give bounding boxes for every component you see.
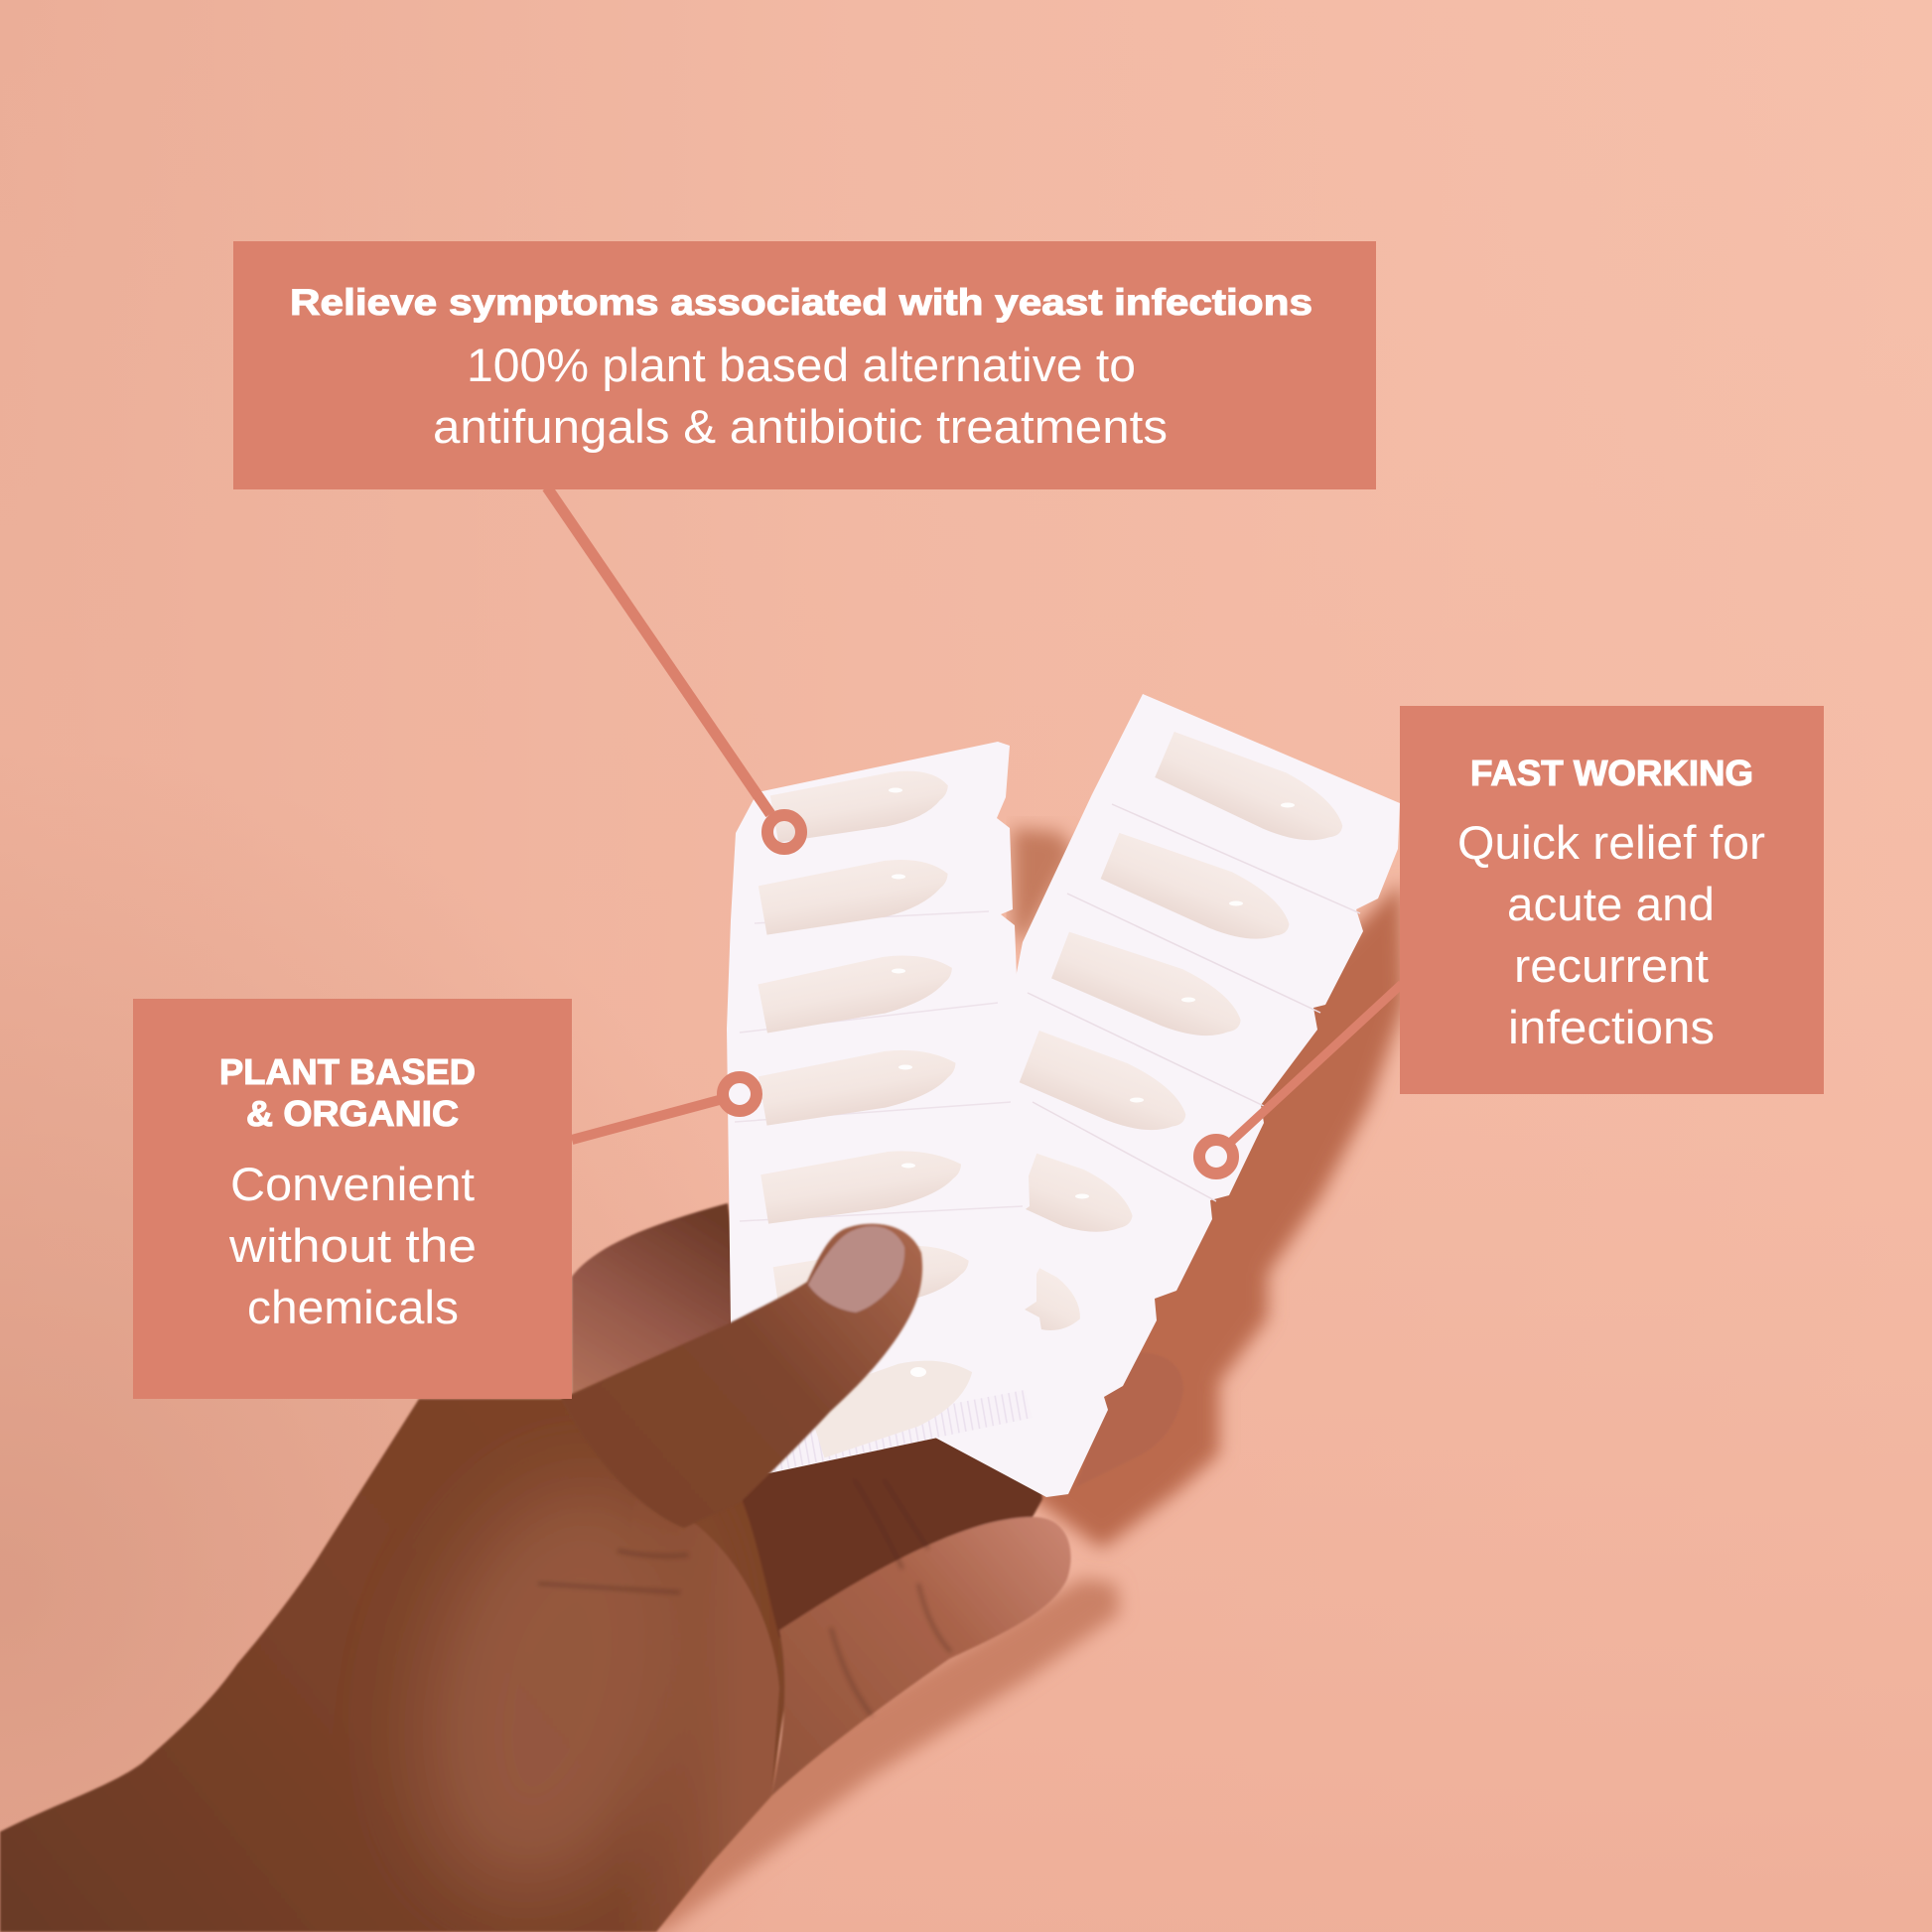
middle finger [771, 1517, 1071, 1796]
callout heading: left: & ORGANIC [246, 1093, 459, 1134]
lighter back of the hand [377, 1453, 735, 1922]
callout: left [133, 999, 572, 1399]
callout body: left [228, 1158, 477, 1333]
skin creases [538, 1479, 951, 1716]
callout body: right: recurrent [1514, 939, 1709, 992]
callout: right [1400, 706, 1824, 1094]
cast shadows [596, 828, 1405, 1932]
callout heading: left [219, 1051, 476, 1134]
palm and forearm [0, 1203, 794, 1932]
callout body: top: 100% plant based alternative to [467, 339, 1136, 391]
callout body: top: antifungals & antibiotic treatments [433, 400, 1168, 453]
callout body: right: acute and [1507, 878, 1715, 930]
index finger in shade [740, 1425, 1042, 1638]
callout heading: top: Relieve symptoms associated with yeast infections [290, 282, 1312, 323]
hand: palm and fingers behind blister strips [0, 1203, 1183, 1932]
callout: top [233, 241, 1376, 489]
connector: top callout [547, 487, 801, 849]
web of the hand above the thumb [572, 1203, 737, 1410]
connector lines and rings [547, 487, 1402, 1173]
connector: left callout [572, 1077, 757, 1140]
callout body: top [433, 339, 1168, 453]
connector: right callout [1199, 984, 1402, 1173]
left strip capsules [758, 762, 983, 1457]
callout body: left: chemicals [247, 1281, 459, 1333]
icon: thumbnail [808, 1226, 904, 1312]
callout heading: right: FAST WORKING [1470, 753, 1753, 793]
right strip capsules [1014, 726, 1353, 1345]
callout body: left: without the [228, 1219, 477, 1272]
callout body: left: Convenient [230, 1158, 475, 1210]
blister strip: right [935, 694, 1400, 1497]
fingertip behind the strips [1076, 1352, 1183, 1487]
callout heading: left: PLANT BASED [219, 1051, 476, 1092]
callout body: right: Quick relief for [1457, 816, 1765, 869]
callout body: right [1457, 816, 1765, 1053]
blister strip: left [727, 742, 1052, 1475]
callout body: right: infections [1508, 1001, 1715, 1053]
hand: thumb over strips [561, 1224, 922, 1528]
lower palm band [566, 1489, 779, 1932]
